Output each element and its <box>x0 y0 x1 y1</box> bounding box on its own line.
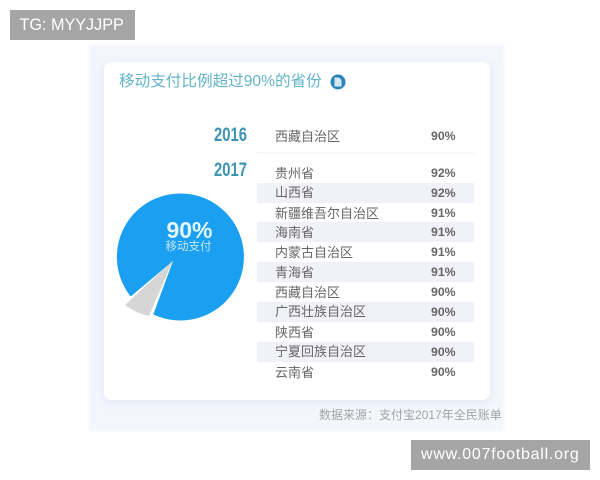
heading: 移动支付比例超过90%的省份 <box>119 73 322 90</box>
row: Guizhou: 92% <box>431 166 456 180</box>
row: Inner Mongolia: 91% <box>431 245 456 259</box>
row: Hainan <box>257 222 474 242</box>
row: Shanxi <box>257 182 474 202</box>
row: Shanxi: 山西省 <box>275 185 314 200</box>
year 2017: 2017 <box>214 160 247 181</box>
year 2016: 2016 <box>214 125 247 146</box>
row: Inner Mongolia: 内蒙古自治区 <box>275 244 353 260</box>
row: Ningxia <box>257 342 474 362</box>
row: Guangxi: 广西壮族自治区 <box>275 304 366 319</box>
row: Hainan: 91% <box>431 225 456 239</box>
row: Xinjiang: 91% <box>431 206 456 220</box>
row: Inner Mongolia <box>275 244 456 260</box>
outer pale backdrop <box>89 45 504 431</box>
row: Qinghai: 91% <box>431 265 456 279</box>
divider between years <box>257 152 474 154</box>
row: Guangxi <box>257 302 474 322</box>
main white card <box>104 62 490 400</box>
watermark top-left: TG: MYYJJPP <box>20 16 124 34</box>
row: Ningxia: 宁夏回族自治区 <box>275 344 366 359</box>
row: Ningxia: 90% <box>431 344 456 358</box>
row: Shaanxi <box>275 324 456 340</box>
2016 row: 90% <box>431 129 456 143</box>
row: Yunnan <box>275 364 456 380</box>
pie chart <box>116 194 244 320</box>
watermark bottom-right: www.007football.org <box>421 446 580 463</box>
row: Qinghai <box>257 262 474 282</box>
row: Hainan: 海南省 <box>275 224 314 240</box>
row: Guangxi: 90% <box>431 304 456 318</box>
row: Shaanxi: 90% <box>431 325 456 339</box>
watermark top-left <box>10 10 135 40</box>
row: Guizhou: 贵州省 <box>275 166 314 180</box>
row: Shaanxi: 陕西省 <box>275 324 314 340</box>
2016 row <box>275 128 456 144</box>
row: Yunnan: 云南省 <box>275 364 314 380</box>
row: Guizhou <box>275 166 456 180</box>
row: Xinjiang: 新疆维吾尔自治区 <box>275 206 379 220</box>
row: Xinjiang <box>275 206 456 220</box>
pie label: 移动支付 <box>166 241 212 253</box>
watermark bottom-right <box>411 440 590 470</box>
row: Yunnan: 90% <box>431 365 456 379</box>
2016 row: 西藏自治区 <box>275 128 340 144</box>
source note: 数据来源：支付宝2017年全民账单 <box>319 408 502 422</box>
blue slice 90% <box>117 193 244 320</box>
row: Shanxi: 92% <box>431 186 456 200</box>
grey slice 10% <box>125 261 173 316</box>
2017 province table <box>257 166 474 380</box>
icon: document <box>330 74 346 90</box>
row: Tibet: 西藏自治区 <box>275 284 340 300</box>
row: Tibet <box>275 284 456 300</box>
row: Tibet: 90% <box>431 285 456 299</box>
pie value: 90% <box>166 217 213 243</box>
row: Qinghai: 青海省 <box>275 264 314 280</box>
